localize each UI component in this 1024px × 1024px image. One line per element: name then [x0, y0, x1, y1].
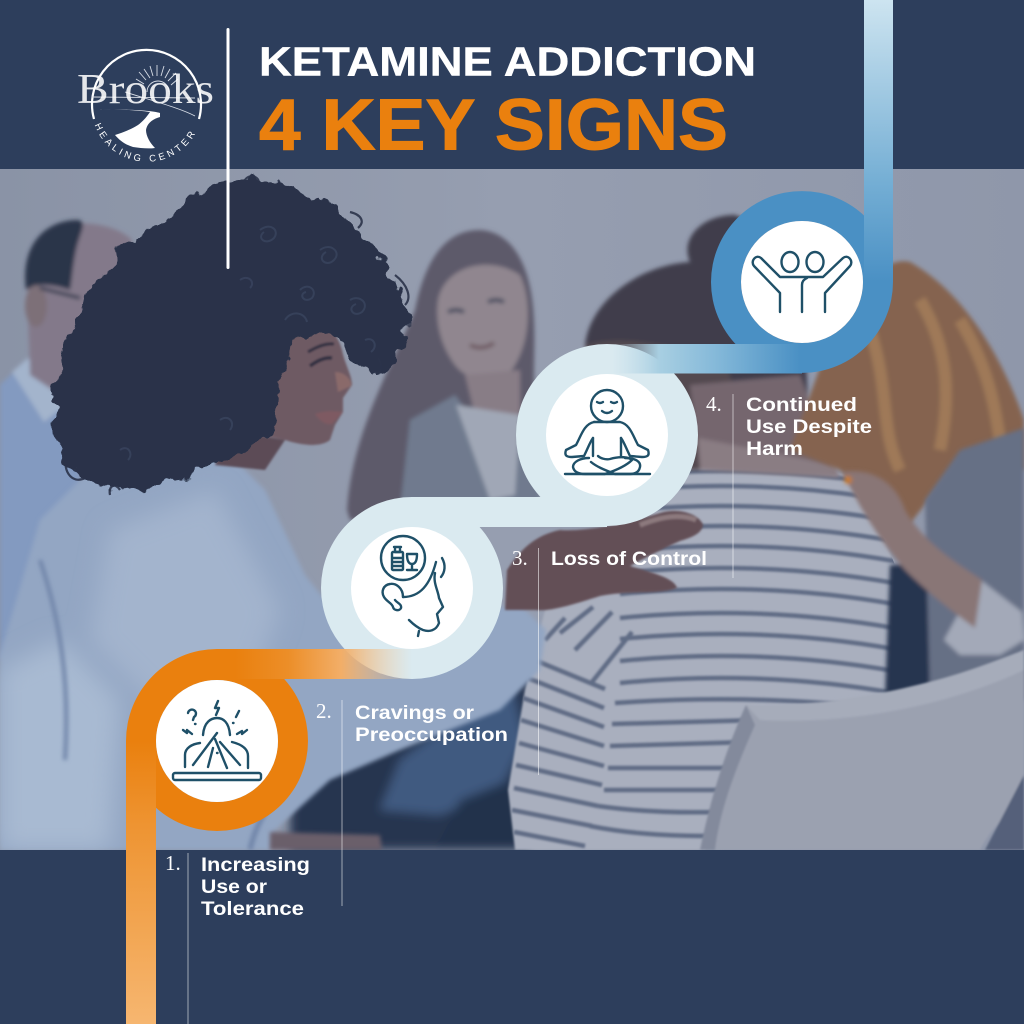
step 2 text: Preoccupation	[355, 725, 508, 746]
icon: head thinking of bottle and glass	[381, 536, 445, 636]
jeans and dark lower area	[290, 660, 530, 850]
step 1 ring and connectors	[126, 649, 412, 1024]
icon: overwhelmed person	[173, 701, 261, 780]
title line 1: KETAMINE ADDICTION	[259, 38, 756, 84]
header divider	[226, 28, 230, 269]
shirt folds	[40, 560, 382, 850]
footer band	[0, 850, 1024, 1024]
step 4 ring and connectors	[612, 0, 893, 374]
step 1 text: Tolerance	[201, 899, 304, 920]
step 1 text: Increasing	[201, 855, 310, 876]
step 2 label	[316, 699, 508, 906]
step 1 number: 1.	[165, 851, 181, 875]
striped shirt woman	[508, 458, 905, 850]
header band	[0, 0, 1024, 169]
title	[259, 38, 756, 166]
step 2 text	[355, 703, 508, 746]
step 2 number: 2.	[316, 699, 332, 723]
shirt stripes	[512, 471, 905, 846]
step 1 label	[165, 851, 310, 1024]
step 4 text: Harm	[746, 439, 803, 460]
step 4 text: Use Despite	[746, 417, 872, 438]
sun rays	[92, 65, 195, 116]
step 4 number: 4.	[706, 392, 722, 416]
step 3 label	[512, 546, 707, 775]
curly haired woman shirt	[0, 450, 546, 850]
man at left	[0, 220, 132, 660]
curly hair	[53, 180, 406, 491]
bun woman hair and neck	[585, 215, 840, 478]
chair	[700, 650, 1024, 850]
title line 2: 4 KEY SIGNS	[259, 86, 728, 166]
woman in background	[347, 230, 540, 520]
hair wisps	[52, 176, 408, 495]
curly haired woman face	[215, 321, 352, 470]
step 4 text	[746, 395, 872, 460]
icon: meditating person	[565, 390, 650, 474]
photo: support group	[0, 169, 1024, 850]
logo wordmark: Brooks	[77, 67, 214, 113]
logo: Brooks Healing Center	[77, 48, 214, 162]
cardigan and arm	[843, 428, 1024, 700]
red haired woman	[790, 261, 1024, 530]
road	[98, 110, 160, 148]
step 3 number: 3.	[512, 546, 528, 570]
step 4 label	[706, 392, 872, 578]
shirt highlights	[0, 490, 280, 850]
logo tagline: HEALING CENTER	[94, 122, 195, 162]
step 2 ring and connector	[321, 497, 607, 679]
step 1 text: Use or	[201, 877, 268, 898]
step 1 text	[201, 855, 310, 920]
step 3 ring	[516, 344, 698, 526]
icon: two people arms raised	[753, 252, 851, 312]
hand on back	[505, 511, 703, 610]
step 4 text: Continued	[746, 395, 857, 416]
hair strands	[120, 227, 375, 460]
step 3 text: Loss of Control	[551, 549, 707, 570]
step 2 text: Cravings or	[355, 703, 475, 724]
